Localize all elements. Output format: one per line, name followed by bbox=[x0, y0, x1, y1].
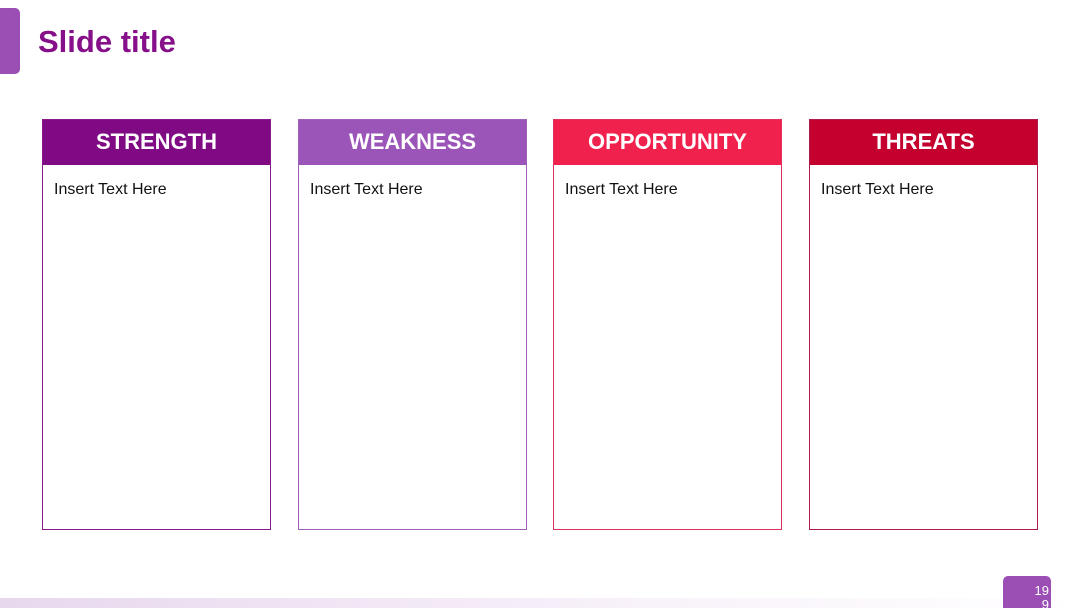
bottom gradient bar bbox=[0, 598, 1080, 608]
panel: strength bbox=[42, 119, 271, 530]
panel: opportunity: OPPORTUNITY bbox=[588, 129, 747, 154]
panel: weakness bbox=[298, 119, 527, 530]
panel: strength: Insert Text Here bbox=[54, 181, 167, 198]
panel: weakness: WEAKNESS bbox=[349, 129, 476, 154]
title tab accent bbox=[0, 8, 20, 74]
panel: strength: STRENGTH bbox=[96, 129, 217, 154]
panel: opportunity: Insert Text Here bbox=[565, 181, 678, 198]
page number: 19 bbox=[1035, 583, 1049, 598]
panel: weakness: Insert Text Here bbox=[310, 181, 423, 198]
panel: threats bbox=[809, 119, 1038, 530]
panel: threats: THREATS bbox=[872, 129, 975, 154]
panel: opportunity bbox=[553, 119, 782, 530]
panel: threats: Insert Text Here bbox=[821, 181, 934, 198]
title: Slide title bbox=[38, 24, 176, 59]
page number bbox=[1003, 576, 1051, 608]
